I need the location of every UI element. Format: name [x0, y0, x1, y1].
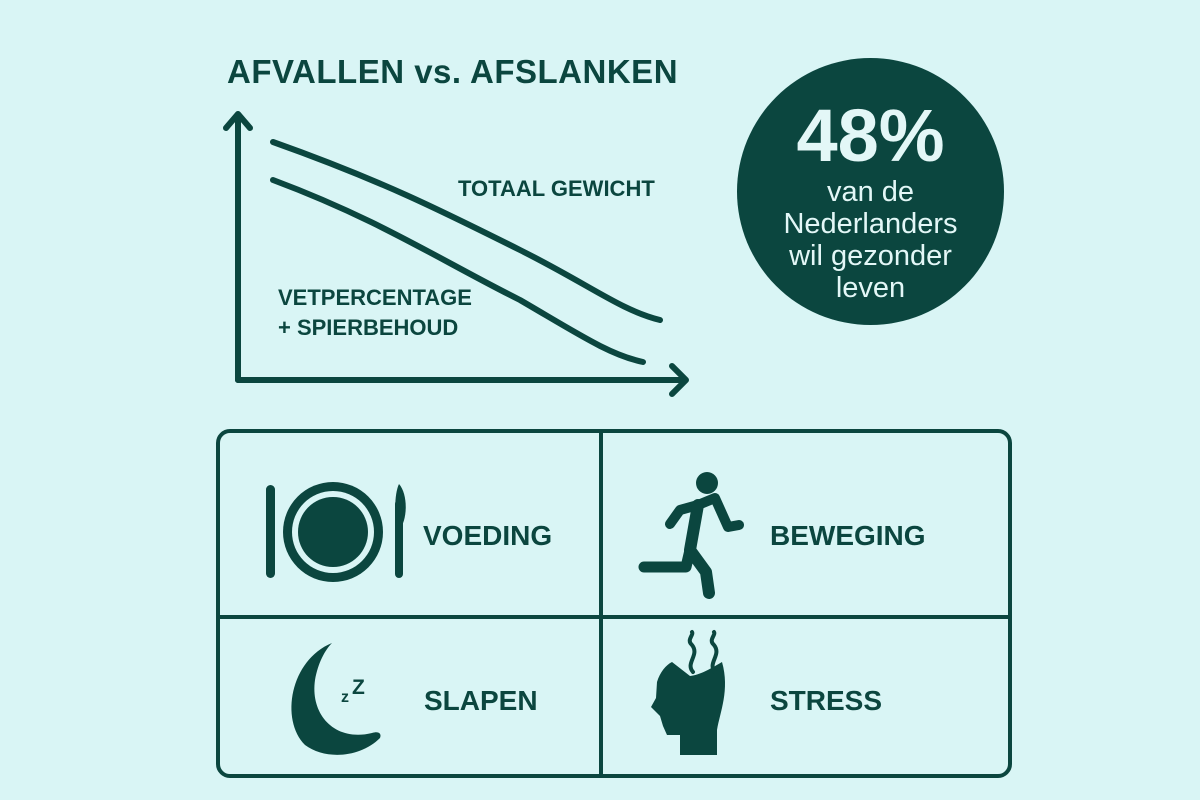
stat text: Nederlanders: [783, 208, 958, 240]
icon: moon with zz: z: [341, 689, 349, 706]
label: voeding: VOEDING: [423, 520, 552, 551]
icon: plate and cutlery: [266, 482, 406, 582]
panel grid: [216, 429, 1012, 778]
icon: head with steam: [651, 632, 725, 755]
stat text: [783, 176, 958, 304]
title: AFVALLEN vs. AFSLANKEN: [227, 53, 678, 90]
icon: moon with zz: Z: [352, 676, 365, 699]
stat text: leven: [836, 272, 905, 304]
label: totaal gewicht: TOTAAL GEWICHT: [458, 176, 655, 201]
stat number: 48%: [796, 94, 945, 177]
icon: runner: [644, 472, 739, 593]
label: beweging: BEWEGING: [770, 520, 926, 551]
label: vetpercentage: [278, 285, 472, 340]
stat circle: [737, 58, 1004, 325]
stat text: van de: [827, 176, 914, 208]
axis: y: [226, 114, 250, 380]
label: slapen: SLAPEN: [424, 685, 538, 716]
stat text: wil gezonder: [789, 240, 952, 272]
label: vetpercentage: VETPERCENTAGE: [278, 285, 472, 310]
label: vetpercentage: + SPIERBEHOUD: [278, 315, 458, 340]
curve: totaal gewicht: [273, 142, 660, 320]
label: stress: STRESS: [770, 685, 882, 716]
axis: x: [238, 366, 686, 394]
curve: vetpercentage: [273, 180, 643, 362]
icon: moon with zz: [291, 643, 381, 755]
